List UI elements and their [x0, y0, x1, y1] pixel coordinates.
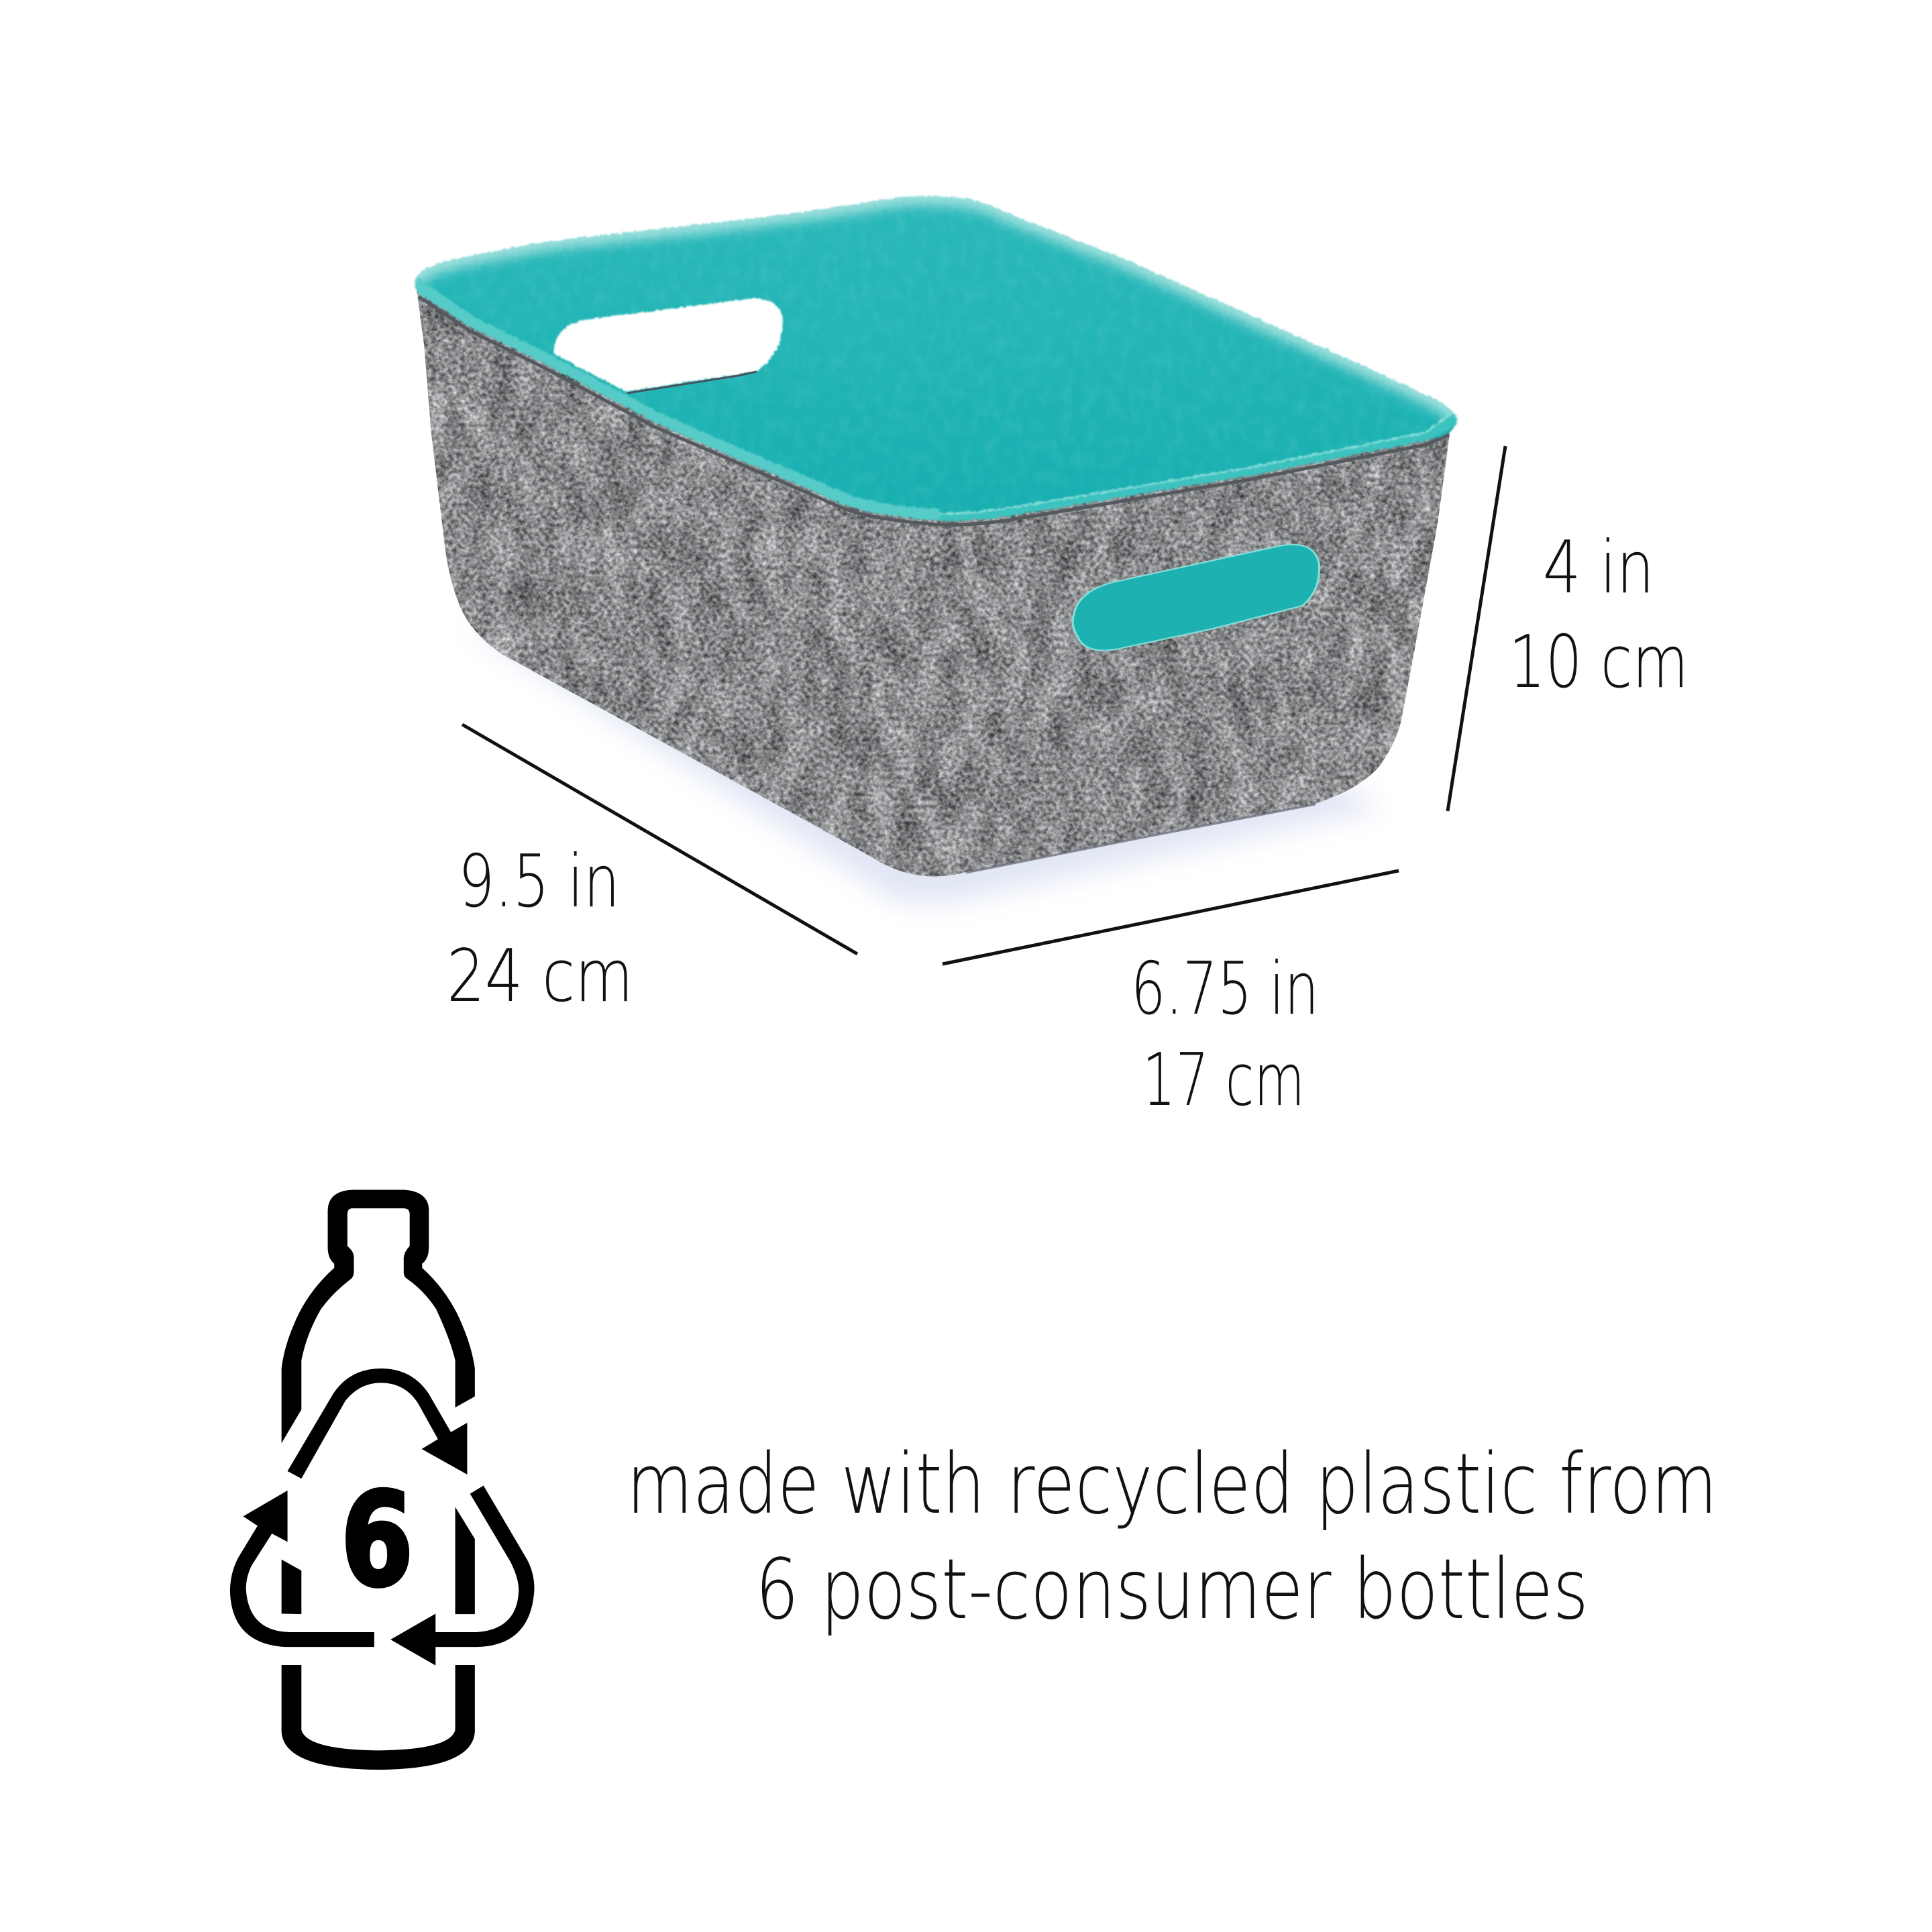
basket teal interior — [402, 188, 1476, 537]
bottom edge contact shadow — [966, 804, 1316, 873]
basket soft shadow — [463, 624, 1382, 902]
front rim light band right — [939, 419, 1456, 518]
recycled plastic caption: 6 post-consumer bottles — [755, 1542, 1589, 1638]
bottle outline — [282, 1190, 475, 1770]
dimension line: length — [462, 724, 857, 954]
front rim light band left — [415, 284, 939, 517]
width label: 6.75 in — [1131, 947, 1319, 1031]
dimension line: height — [1448, 446, 1505, 811]
back handle cut-out — [553, 298, 783, 392]
width label — [1131, 947, 1319, 1122]
front handle cut-out — [1073, 545, 1320, 651]
dimension line: width — [943, 871, 1399, 964]
height label — [1509, 526, 1688, 704]
length label — [447, 840, 633, 1018]
basket felt body — [402, 268, 1476, 892]
recycled plastic caption — [627, 1436, 1717, 1638]
basket photo — [402, 188, 1476, 902]
height label: 10 cm — [1509, 621, 1688, 704]
recycling arrows — [230, 1368, 534, 1666]
width label: 17 cm — [1142, 1038, 1305, 1122]
front rim shadow line — [419, 297, 1449, 525]
height label: 4 in — [1543, 526, 1654, 610]
length label: 24 cm — [447, 934, 633, 1018]
length label: 9.5 in — [458, 840, 620, 924]
back edge pale fade — [415, 196, 1457, 419]
back handle lower edge — [627, 372, 757, 393]
recycled plastic caption: made with recycled plastic from — [627, 1436, 1717, 1533]
bottle count number: 6 — [341, 1466, 413, 1615]
icon: recycled bottle — [230, 1190, 534, 1770]
